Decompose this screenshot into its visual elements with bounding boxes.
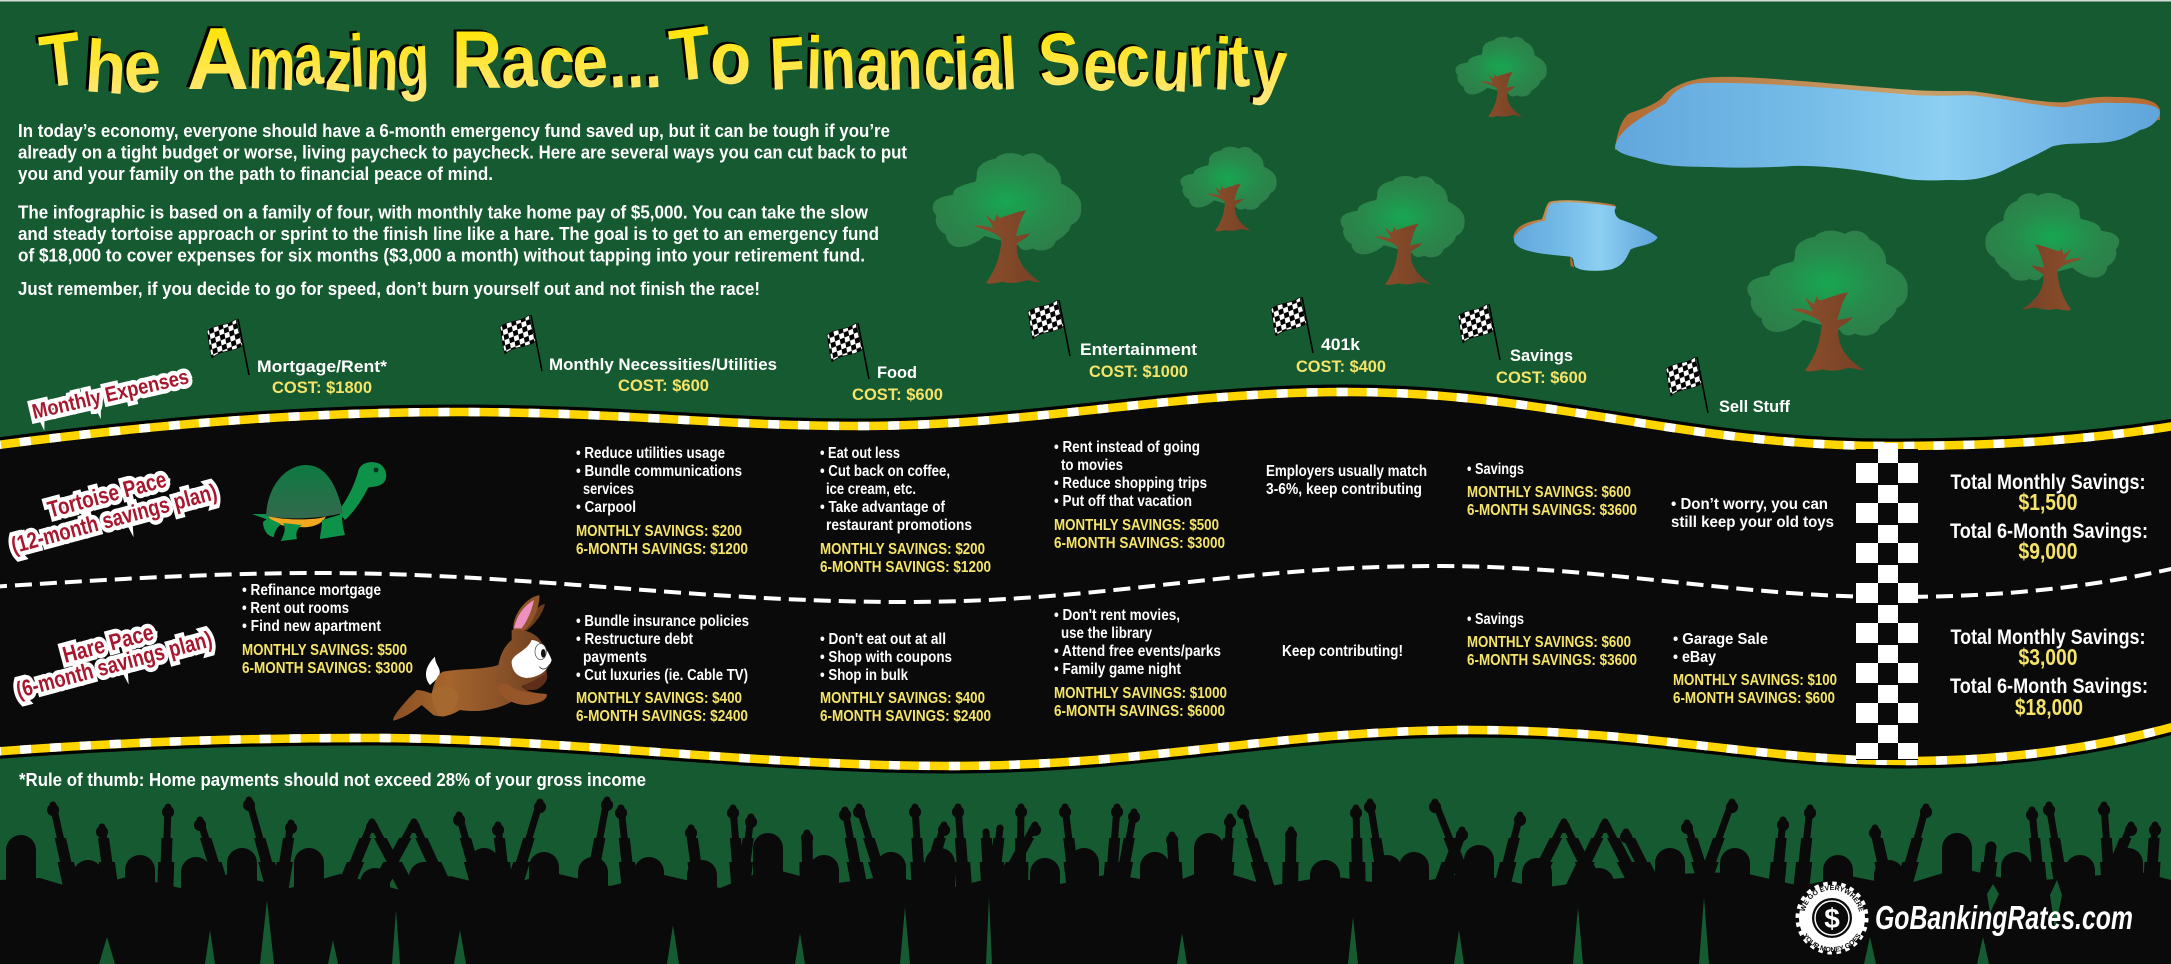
hare plan: sell stuff: 6-MONTH SAVINGS: $600 (1673, 690, 1835, 707)
tortoise plan: food tips: • Cut back on coffee, (820, 463, 950, 480)
title: A (187, 9, 249, 108)
tortoise plan: food tips: 6-MONTH SAVINGS: $1200 (820, 559, 991, 576)
logo: GoBankingRates badge and wordmark: $ (1824, 903, 1840, 934)
hare plan: mortgage tips: • Find new apartment (242, 618, 382, 635)
hare plan: utilities tips: payments (583, 649, 647, 666)
title: mazing (247, 17, 431, 107)
hare plan: sell stuff: • eBay (1673, 649, 1716, 666)
tortoise plan: savings: MONTHLY SAVINGS: $600 (1467, 484, 1631, 501)
hare plan: food tips (820, 631, 991, 725)
tortoise plan: utilities tips: • Reduce utilities usage (576, 445, 725, 462)
hare plan: food tips: • Don't eat out at all (820, 631, 946, 648)
crowd silhouette (0, 800, 2171, 964)
tortoise plan: sell stuff (1671, 496, 1834, 531)
tree 3 (1341, 176, 1465, 285)
title: ace... (498, 19, 664, 104)
hare totals (1950, 626, 2148, 720)
tortoise plan: utilities tips: services (583, 481, 634, 498)
intro text: already on a tight budget or worse, living paycheck to paycheck. Here are several ways you can cut back to put (18, 142, 907, 162)
hare plan: utilities tips: MONTHLY SAVINGS: $400 (576, 690, 742, 707)
hare plan: entertainment tips: 6-MONTH SAVINGS: $6000 (1054, 703, 1225, 720)
label: entertainment cost: COST: $1000 (1089, 362, 1188, 381)
hare plan: sell stuff (1673, 631, 1837, 707)
label: entertainment cost (1080, 340, 1197, 381)
footnote: *Rule of thumb: Home payments should not exceed 28% of your gross income (19, 770, 646, 790)
hare plan: entertainment tips: • Family game night (1054, 661, 1182, 678)
label: mortgage/rent cost: Mortgage/Rent* (257, 357, 387, 376)
tortoise plan: savings: • Savings (1467, 461, 1524, 478)
tortoise plan: food tips: MONTHLY SAVINGS: $200 (820, 541, 985, 558)
tortoise plan: sell stuff: still keep your old toys (1671, 514, 1834, 531)
tortoise plan: food tips: • Take advantage of (820, 499, 946, 516)
tortoise plan: food tips: • Eat out less (820, 445, 900, 462)
tortoise plan: utilities tips: 6-MONTH SAVINGS: $1200 (576, 541, 748, 558)
hare plan: food tips: MONTHLY SAVINGS: $400 (820, 690, 985, 707)
tortoise totals: $1,500 (2018, 489, 2078, 515)
intro text: and steady tortoise approach or sprint to the finish line like a hare. The goal is to get to an emergency fund (18, 224, 879, 244)
tortoise plan: sell stuff: • Don’t worry, you can (1671, 496, 1828, 513)
tree 5 (1747, 231, 1908, 371)
race track (0, 389, 2171, 769)
title: The (35, 17, 163, 110)
flag: savings (1458, 304, 1500, 360)
tortoise plan: utilities tips: • Carpool (576, 499, 636, 516)
sticker: tortoise pace: (12-month savings plan) (8, 478, 220, 558)
hare illustration (393, 595, 552, 721)
label: sell stuff: Sell Stuff (1719, 397, 1790, 416)
logo: GoBankingRates badge and wordmark: WE GO EVERYWHERE (1800, 885, 1864, 912)
label: entertainment cost: Entertainment (1080, 340, 1197, 359)
tortoise plan: 401k note: 3-6%, keep contributing (1266, 481, 1422, 498)
hare plan: mortgage tips: 6-MONTH SAVINGS: $3000 (242, 660, 413, 677)
label: savings cost: COST: $600 (1496, 368, 1587, 387)
tortoise plan: utilities tips: MONTHLY SAVINGS: $200 (576, 523, 742, 540)
hare plan: food tips: • Shop with coupons (820, 649, 952, 666)
intro text: of $18,000 to cover expenses for six months ($3,000 a month) without tapping into your retirement fund. (18, 246, 865, 266)
hare plan: entertainment tips: use the library (1061, 625, 1152, 642)
label: utilities cost (549, 355, 777, 395)
tree 2 (1180, 147, 1277, 231)
tortoise totals (1950, 471, 2148, 564)
intro text: you and your family on the path to financial peace of mind. (18, 164, 493, 184)
title: Security (1034, 16, 1291, 108)
hare plan: entertainment tips: MONTHLY SAVINGS: $1000 (1054, 685, 1227, 702)
label: mortgage/rent cost: COST: $1800 (272, 378, 372, 397)
tortoise plan: food tips (820, 445, 991, 576)
label: savings cost (1496, 346, 1587, 387)
tortoise plan: utilities tips (576, 445, 748, 558)
hare totals: $3,000 (2018, 644, 2078, 670)
title: To (665, 11, 755, 101)
label: savings cost: Savings (1510, 346, 1573, 365)
finish line checker (1856, 443, 1918, 760)
hare plan: food tips: • Shop in bulk (820, 667, 908, 684)
hare plan: savings: • Savings (1467, 611, 1524, 628)
sticker: hare pace: Hare Pace (60, 619, 156, 668)
label: food cost (852, 363, 943, 404)
flag: food (827, 323, 869, 379)
tortoise plan: 401k note (1266, 463, 1427, 498)
label: 401k cost: COST: $400 (1296, 357, 1386, 376)
hare plan: utilities tips: • Restructure debt (576, 631, 694, 648)
intro text: The infographic is based on a family of four, with monthly take home pay of $5,000. You can take the slow (18, 202, 869, 222)
hare plan: utilities tips: • Bundle insurance policies (576, 613, 749, 630)
label: 401k cost: 401k (1321, 335, 1361, 354)
intro text: Just remember, if you decide to go for speed, don’t burn yourself out and not finish the race! (18, 279, 760, 299)
tortoise illustration (252, 462, 386, 541)
hare plan: entertainment tips (1054, 607, 1227, 720)
hare plan: sell stuff: MONTHLY SAVINGS: $100 (1673, 672, 1837, 689)
hare totals: $18,000 (2015, 694, 2083, 720)
tree 1 (933, 153, 1081, 284)
tortoise totals: $9,000 (2018, 538, 2078, 564)
hare plan: savings: 6-MONTH SAVINGS: $3600 (1467, 652, 1637, 669)
hare plan: 401k note: Keep contributing! (1282, 643, 1403, 660)
hare plan: sell stuff: • Garage Sale (1673, 631, 1768, 648)
intro text: In today’s economy, everyone should have a 6-month emergency fund saved up, but it can be tough if you’re (18, 121, 890, 141)
tree 4 (1455, 37, 1547, 117)
flag: sell stuff (1666, 357, 1708, 413)
tortoise plan: savings: 6-MONTH SAVINGS: $3600 (1467, 502, 1637, 519)
hare plan: entertainment tips: • Don't rent movies, (1054, 607, 1180, 624)
hare plan: utilities tips: • Cut luxuries (ie. Cable TV) (576, 667, 748, 684)
tortoise plan: food tips: ice cream, etc. (826, 481, 916, 498)
hare plan: utilities tips: 6-MONTH SAVINGS: $2400 (576, 708, 748, 725)
hare plan: mortgage tips (242, 582, 413, 677)
hare plan: utilities tips (576, 613, 749, 725)
hare plan: entertainment tips: • Attend free events/parks (1054, 643, 1221, 660)
logo: GoBankingRates badge and wordmark: YOUR MONEY GOES (1804, 932, 1860, 952)
large pond (1615, 77, 2160, 180)
flag: mortgage (207, 319, 249, 375)
sticker: hare pace: (6-month savings plan) (13, 626, 215, 703)
tortoise plan: entertainment tips: to movies (1061, 457, 1123, 474)
tortoise plan: savings (1467, 461, 1637, 519)
tortoise plan: entertainment tips: • Reduce shopping trips (1054, 475, 1207, 492)
hare plan: savings: MONTHLY SAVINGS: $600 (1467, 634, 1631, 651)
label: food cost: COST: $600 (852, 385, 943, 404)
hare plan: mortgage tips: • Refinance mortgage (242, 582, 381, 599)
tree 6 (1986, 193, 2119, 310)
label: food cost: Food (877, 363, 917, 382)
title: R (452, 15, 502, 106)
tortoise plan: entertainment tips: • Put off that vacation (1054, 493, 1192, 510)
tortoise plan: utilities tips: • Bundle communications (576, 463, 742, 480)
label: mortgage/rent cost (257, 357, 387, 397)
tortoise plan: entertainment tips: • Rent instead of going (1054, 439, 1200, 456)
hare plan: mortgage tips: • Rent out rooms (242, 600, 349, 617)
tortoise plan: entertainment tips (1054, 439, 1225, 552)
flag: 401k (1271, 297, 1313, 353)
intro text (18, 121, 907, 299)
tortoise plan: food tips: restaurant promotions (826, 517, 972, 534)
logo: GoBankingRates badge and wordmark (1796, 882, 2133, 954)
label: utilities cost: Monthly Necessities/Utilities (549, 355, 777, 374)
tortoise plan: entertainment tips: MONTHLY SAVINGS: $500 (1054, 517, 1219, 534)
title (35, 9, 1291, 110)
sticker: tortoise pace: Tortoise Pace (45, 466, 169, 523)
tortoise plan: entertainment tips: 6-MONTH SAVINGS: $3000 (1054, 535, 1225, 552)
hare plan: mortgage tips: MONTHLY SAVINGS: $500 (242, 642, 407, 659)
label: utilities cost: COST: $600 (618, 376, 709, 395)
label: 401k cost (1296, 335, 1386, 376)
flag: utilities (500, 315, 542, 371)
small pond (1513, 200, 1658, 271)
sticker: monthly expenses: Monthly Expenses (30, 365, 191, 424)
flag: entertainment (1028, 300, 1070, 356)
title: Financial (767, 21, 1019, 106)
tortoise plan: 401k note: Employers usually match (1266, 463, 1427, 480)
hare plan: savings (1467, 611, 1637, 669)
hare plan: food tips: 6-MONTH SAVINGS: $2400 (820, 708, 991, 725)
